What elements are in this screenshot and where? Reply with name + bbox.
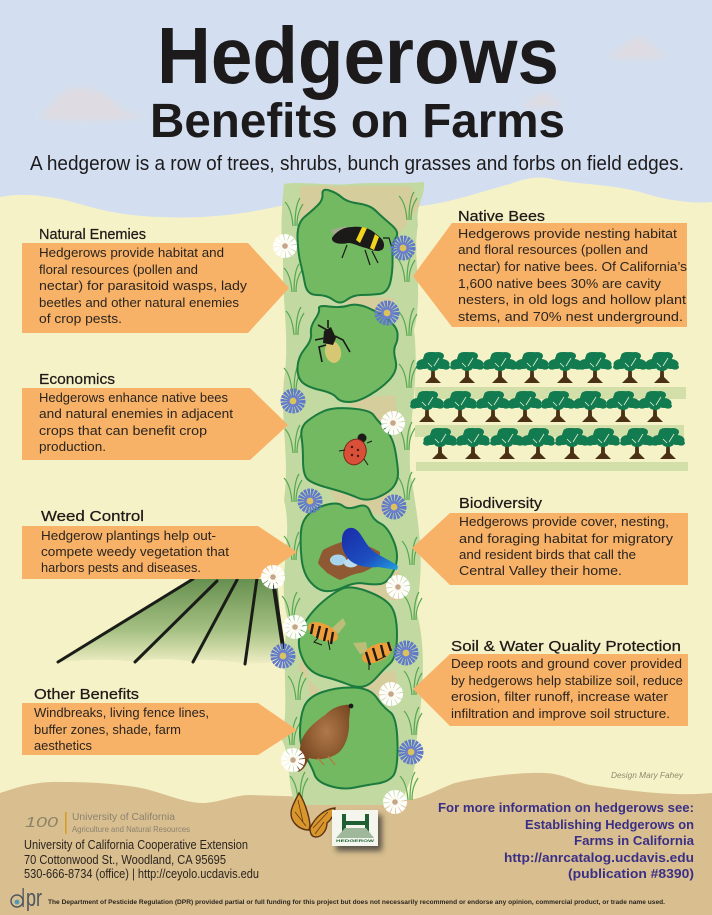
contact text: University of California Cooperative Extension xyxy=(24,838,248,852)
more information text: (publication #8390) xyxy=(568,866,694,881)
logo: university of california: 100 xyxy=(25,814,59,831)
panel: weed control: compete weedy vegetation that xyxy=(41,544,229,559)
more information text: For more information on hedgerows see: xyxy=(438,800,694,815)
panel: weed control xyxy=(22,508,297,579)
logo: hedgerow work group: HEDGEROW xyxy=(336,838,374,843)
grass tufts xyxy=(282,192,422,800)
panel: economics: Economics xyxy=(39,371,115,388)
more information text: Establishing Hedgerows on xyxy=(525,817,694,832)
panel: weed control: Hedgerow plantings help out- xyxy=(41,528,216,543)
panel: natural enemies: Natural Enemies xyxy=(39,226,146,243)
contact text: 70 Cottonwood St., Woodland, CA 95695 xyxy=(24,853,226,867)
flowers xyxy=(265,238,420,810)
disclaimer: The Department of Pesticide Regulation (DPR) provided partial or full funding for this project but does not necessarily recommend or endorse any opinion, commercial product, or trade name used. xyxy=(48,900,665,906)
ground xyxy=(0,773,712,915)
panel: economics xyxy=(22,371,288,460)
panel: weed control: Weed Control xyxy=(41,508,144,525)
icon: bee left xyxy=(305,618,346,650)
panel: natural enemies: nectar) for parasitoid wasps, lady xyxy=(39,278,248,293)
more information text: http://anrcatalog.ucdavis.edu xyxy=(504,850,694,865)
more information text xyxy=(438,800,695,881)
clouds xyxy=(38,37,670,121)
subtitle heading: Benefits on Farms xyxy=(150,95,565,148)
icon: bumble bee xyxy=(331,226,392,265)
panel: biodiversity: and foraging habitat for migratory xyxy=(459,531,674,546)
panel: soil and water quality: by hedgerows help stabilize soil, reduce xyxy=(451,673,683,688)
panel: soil and water quality xyxy=(413,638,688,726)
contact text: 530-666-8734 (office) | http://ceyolo.ucdavis.edu xyxy=(24,867,259,881)
logo: dpr: pr xyxy=(26,885,42,912)
panel: natural enemies: floral resources (pollen and xyxy=(39,262,198,277)
panel: biodiversity: Central Valley their home. xyxy=(459,563,622,578)
logo: university of california xyxy=(25,811,190,834)
panel: natural enemies: beetles and other natural enemies xyxy=(39,295,240,310)
panel: native bees: stems, and 70% nest underground. xyxy=(458,309,683,324)
panel: native bees: nectar) for native bees. Of California’s xyxy=(458,259,688,274)
panel: soil and water quality: erosion, filter runoff, increase water xyxy=(451,689,669,704)
contact text xyxy=(24,838,259,881)
panel: other benefits: buffer zones, shade, farm xyxy=(34,722,181,737)
panel: native bees: nesters, in old logs and hollow plant xyxy=(458,292,686,307)
panel: other benefits: Windbreaks, living fence lines, xyxy=(34,705,209,720)
panel: natural enemies xyxy=(22,226,289,333)
panel: weed control: harbors pests and diseases. xyxy=(41,560,201,575)
panel: other benefits xyxy=(22,686,297,755)
panel: natural enemies: of crop pests. xyxy=(39,311,122,326)
panel: biodiversity xyxy=(412,495,688,585)
panel: soil and water quality: Deep roots and ground cover provided xyxy=(451,656,682,671)
icon: bee right xyxy=(353,639,395,670)
panel: natural enemies: Hedgerows provide habitat and xyxy=(39,245,224,260)
panel: native bees: Native Bees xyxy=(458,208,545,225)
title: Hedgerows xyxy=(157,11,559,100)
icon: nest and bluebird xyxy=(318,528,398,580)
panel: biodiversity: and resident birds that call the xyxy=(459,547,636,562)
panel: economics: and natural enemies in adjacent xyxy=(39,406,233,421)
logo: dpr xyxy=(11,885,42,912)
panel: economics: production. xyxy=(39,439,106,454)
panel: native bees: Hedgerows provide nesting habitat xyxy=(458,226,677,241)
panel: other benefits: Other Benefits xyxy=(34,686,139,703)
panel: native bees: and floral resources (pollen and xyxy=(458,242,648,257)
panel: soil and water quality: Soil & Water Quality Protection xyxy=(451,638,681,655)
icon: beetle xyxy=(315,320,350,364)
logo: university of california: Agriculture and Natural Resources xyxy=(72,825,190,834)
panel: economics: crops that can benefit crop xyxy=(39,423,207,438)
design credit: Design Mary Fahey xyxy=(611,771,684,780)
panel: other benefits: aesthetics xyxy=(34,738,92,753)
icon: quail xyxy=(297,704,353,772)
panel: native bees xyxy=(413,208,688,327)
panel: native bees: 1,600 native bees 30% are cavity xyxy=(458,276,662,291)
farm field with furrows xyxy=(58,578,283,664)
panel: economics: Hedgerows enhance native bees xyxy=(39,390,228,405)
definition text: A hedgerow is a row of trees, shrubs, bunch grasses and forbs on field edges. xyxy=(30,153,684,175)
more information text: Farms in California xyxy=(574,833,695,848)
panel: soil and water quality: infiltration and improve soil structure. xyxy=(451,706,670,721)
tree orchard xyxy=(410,352,688,471)
icon: butterfly xyxy=(291,793,335,837)
panel: biodiversity: Biodiversity xyxy=(459,495,543,512)
shrubs xyxy=(297,190,398,788)
panel: biodiversity: Hedgerows provide cover, nesting, xyxy=(459,514,669,529)
logo: university of california: University of California xyxy=(72,811,175,823)
hedgerow strip xyxy=(281,182,424,805)
logo: hedgerow work group xyxy=(332,810,382,851)
icon: ladybug xyxy=(339,434,372,468)
